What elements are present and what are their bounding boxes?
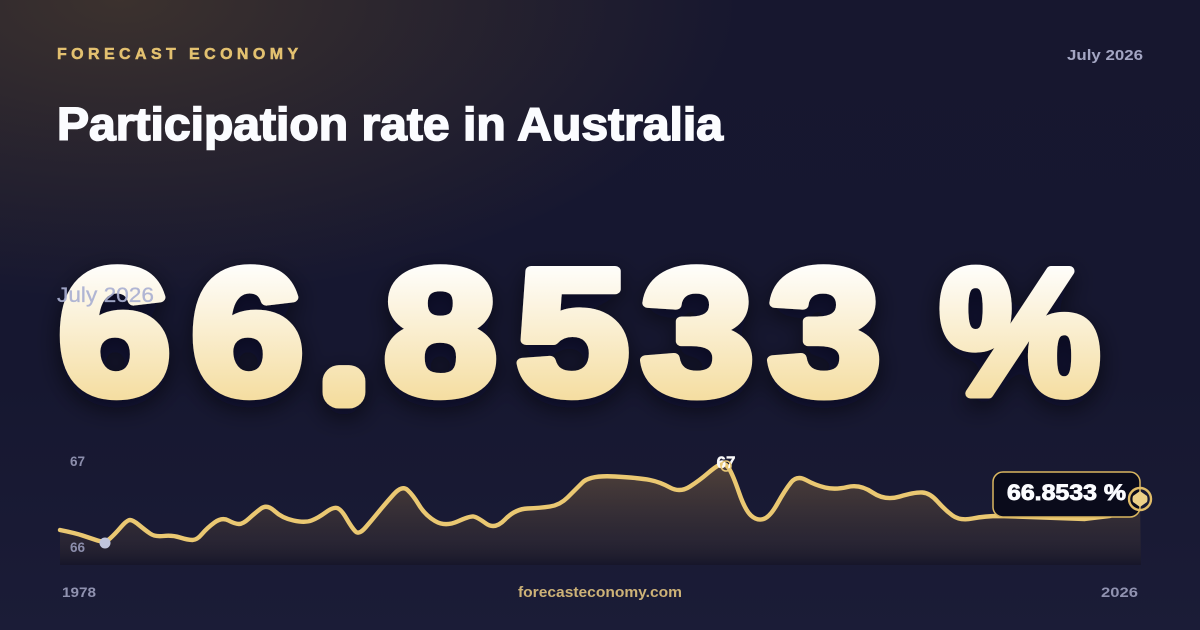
big value: % bbox=[940, 232, 1100, 431]
big value: 8533 bbox=[384, 233, 881, 432]
source url: forecasteconomy.com bbox=[518, 585, 682, 601]
date overlay: July 2026 bbox=[57, 284, 154, 307]
chart area fill bbox=[60, 464, 1141, 565]
value callout bbox=[993, 472, 1140, 517]
brand label: FORECAST ECONOMY bbox=[57, 46, 303, 63]
start year: 1978 bbox=[62, 584, 96, 600]
title: Participation rate in Australia bbox=[57, 98, 723, 150]
maximum point label: 67 bbox=[717, 453, 735, 472]
date top right: July 2026 bbox=[1067, 47, 1143, 64]
big value: . bbox=[334, 329, 354, 407]
axis label: 66: 66 bbox=[70, 540, 86, 555]
area chart bbox=[60, 453, 1141, 565]
chart line bbox=[60, 464, 1140, 541]
value callout: 66.8533 % bbox=[1007, 480, 1126, 505]
big value: 66 bbox=[58, 233, 304, 432]
end year: 2026 bbox=[1101, 584, 1138, 600]
latest point marker bbox=[1129, 488, 1151, 510]
maximum point marker bbox=[721, 461, 731, 471]
axis label: 67: 67 bbox=[70, 454, 85, 469]
big value bbox=[58, 232, 1100, 432]
minimum point marker bbox=[100, 538, 110, 548]
